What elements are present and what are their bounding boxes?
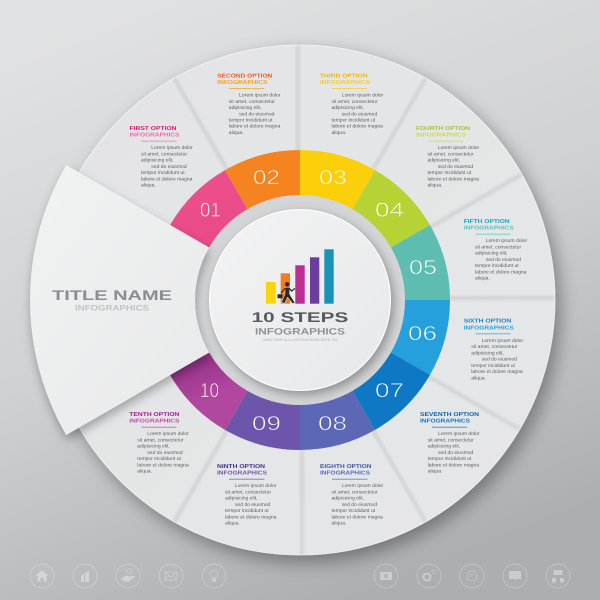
text block: seventh option: adipisicing elit, xyxy=(428,444,460,450)
text block: tenth option: sit amet, consectetur xyxy=(137,438,184,444)
text block: eighth option: sit amet, consectetur xyxy=(332,490,378,496)
text block: tenth option: TENTH OPTION xyxy=(129,412,179,418)
step numbers: 03 xyxy=(319,167,347,189)
segment 07 xyxy=(352,352,430,430)
step numbers xyxy=(200,167,437,435)
text block: fifth option: sed do eiusmod xyxy=(486,257,521,263)
step ring xyxy=(170,150,450,450)
text block: fifth option: labore et dolore magna xyxy=(475,269,527,275)
text block: sixth option: labore et dolore magna xyxy=(471,369,523,375)
text block: third option: labore et dolore magna xyxy=(332,124,383,130)
text block: sixth option: aliqua. xyxy=(471,375,486,381)
text block: tenth option: aliqua. xyxy=(137,469,152,475)
text block: fourth option: Lorem ipsum dolor xyxy=(438,145,480,151)
bar chart icon xyxy=(266,249,334,304)
title sector xyxy=(30,165,209,435)
text block: fifth option: tempor incididunt ut xyxy=(475,263,519,269)
text block: eighth option: INFOGRAPHICS xyxy=(320,471,370,477)
text block: tenth option: tempor incididunt ut xyxy=(137,456,182,462)
text block: fifth option: aliqua. xyxy=(475,276,490,282)
text block: ninth option: INFOGRAPHICS xyxy=(217,471,267,477)
text block: fifth option: Lorem ipsum dolor xyxy=(486,238,527,244)
text block: eighth option: tempor incididunt ut xyxy=(332,508,376,514)
step numbers: 04 xyxy=(375,200,404,222)
step numbers: 02 xyxy=(253,167,280,189)
text block: fifth option xyxy=(464,219,527,282)
text block: second option: Lorem ipsum dolor xyxy=(239,93,281,99)
segment 09 xyxy=(225,391,300,450)
text block: eighth option: labore et dolore magna xyxy=(332,514,383,520)
segment 05 xyxy=(391,225,450,300)
text block: eighth option: sed do eiusmod xyxy=(342,502,377,508)
text block: tenth option: Lorem ipsum dolor xyxy=(147,431,189,437)
text block: fourth option xyxy=(416,126,480,189)
icon: clock xyxy=(460,564,484,588)
text block: second option: adipisicing elit, xyxy=(229,105,261,111)
icon: running businessman xyxy=(278,282,295,304)
text block: seventh option xyxy=(420,412,480,475)
text block: ninth option: labore et dolore magna xyxy=(225,514,277,520)
text block: tenth option xyxy=(129,412,189,475)
text block: third option: THIRD OPTION xyxy=(320,73,368,79)
vector caption: VECTOR ILLUSTRATION EPS 10 xyxy=(263,338,337,342)
text block: sixth option: Lorem ipsum dolor xyxy=(482,338,523,344)
icon row xyxy=(30,564,570,588)
icon: banknote xyxy=(374,564,398,588)
step numbers: 09 xyxy=(252,413,281,435)
text block: tenth option: sed do eiusmod xyxy=(147,450,183,456)
text block: fourth option: labore et dolore magna xyxy=(428,176,479,182)
text block: third option: tempor incididunt ut xyxy=(332,118,376,124)
text block: first option: INFOGRAPHICS xyxy=(130,133,180,139)
text block: seventh option: sit amet, consectetur xyxy=(428,438,474,444)
title subtitle: INFOGRAPHICS xyxy=(75,304,150,313)
text block: first option: adipisicing elit, xyxy=(141,158,174,164)
text block: ninth option: aliqua. xyxy=(225,521,240,527)
text block: fourth option: aliqua. xyxy=(428,183,442,189)
text block: sixth option: adipisicing elit, xyxy=(471,350,504,356)
text block: third option: adipisicing elit, xyxy=(332,105,364,111)
text block: second option: labore et dolore magna xyxy=(229,124,280,130)
outer disc xyxy=(45,45,555,555)
text block: eighth option: aliqua. xyxy=(332,521,346,527)
text block: first option: FIRST OPTION xyxy=(130,126,177,132)
centre subheading: INFOGRAPHICS xyxy=(255,326,345,336)
text block: first option: sit amet, consectetur xyxy=(141,152,187,158)
text block: third option: INFOGRAPHICS xyxy=(320,80,370,86)
icon: light bulb xyxy=(202,564,226,588)
centre heading: 10 STEPS xyxy=(252,309,348,325)
icon: envelope xyxy=(159,564,183,588)
text block: eighth option: adipisicing elit, xyxy=(332,496,364,502)
segment 10 xyxy=(170,352,248,430)
text block: first option: tempor incididunt ut xyxy=(141,170,185,176)
text block: third option xyxy=(320,73,384,136)
text block: second option xyxy=(217,73,281,136)
icon: hierarchy xyxy=(546,564,570,588)
text block: seventh option: aliqua. xyxy=(428,469,442,475)
text block: first option: aliqua. xyxy=(141,183,156,189)
text block: first option: labore et dolore magna xyxy=(141,176,193,182)
text block: tenth option: labore et dolore magna xyxy=(137,462,189,468)
text block: ninth option: sed do eiusmod xyxy=(235,502,271,508)
centre circle xyxy=(210,210,390,390)
icon: gears xyxy=(417,564,441,588)
text block: seventh option: SEVENTH OPTION xyxy=(420,412,479,418)
text block: sixth option: INFOGRAPHICS xyxy=(464,325,514,331)
text block: third option: sed do eiusmod xyxy=(342,111,377,117)
text block: first option: Lorem ipsum dolor xyxy=(151,145,193,151)
inner grey ring xyxy=(194,194,406,406)
segment 01 xyxy=(170,170,248,248)
text block: fifth option: FIFTH OPTION xyxy=(464,219,510,225)
text block: fourth option: sed do eiusmod xyxy=(438,164,473,170)
text block: second option: aliqua. xyxy=(229,130,244,136)
text block: tenth option: INFOGRAPHICS xyxy=(129,419,180,425)
text block: third option: aliqua. xyxy=(332,130,346,136)
text block: second option: INFOGRAPHICS xyxy=(217,80,268,86)
text block: sixth option: sed do eiusmod xyxy=(482,357,517,363)
icon: speech bubble xyxy=(503,564,527,588)
segment 06 xyxy=(391,300,450,375)
text block: ninth option xyxy=(217,464,277,527)
icon: hand with coin xyxy=(116,564,140,588)
icon: growth chart xyxy=(73,564,97,588)
text block: second option: tempor incididunt ut xyxy=(229,118,273,124)
text block: seventh option: sed do eiusmod xyxy=(438,450,474,456)
text block: fifth option: INFOGRAPHICS xyxy=(464,226,514,232)
text block: sixth option: tempor incididunt ut xyxy=(471,363,516,369)
text block: first option: sed do eiusmod xyxy=(151,164,187,170)
text block: second option: sed do eiusmod xyxy=(239,111,275,117)
text block: seventh option: INFOGRAPHICS xyxy=(420,419,470,425)
text block: seventh option: tempor incididunt ut xyxy=(428,456,472,462)
step numbers: 10 xyxy=(200,380,219,402)
text block: seventh option: labore et dolore magna xyxy=(428,462,479,468)
text block: ninth option: NINTH OPTION xyxy=(217,464,265,470)
title name: TITLE NAME xyxy=(52,287,172,303)
step numbers: 05 xyxy=(409,257,437,279)
segment 08 xyxy=(300,391,375,450)
text block: second option: SECOND OPTION xyxy=(217,73,272,79)
text block: fourth option: INFOGRAPHICS xyxy=(416,133,466,139)
text block: sixth option: sit amet, consectetur xyxy=(471,344,518,350)
text block: third option: Lorem ipsum dolor xyxy=(342,93,384,99)
text block: sixth option xyxy=(464,319,523,381)
step numbers: 01 xyxy=(200,200,221,222)
text block: ninth option: adipisicing elit, xyxy=(225,496,258,502)
text block: ninth option: sit amet, consectetur xyxy=(225,490,271,496)
icon: home xyxy=(30,564,54,588)
text block: fourth option: tempor incididunt ut xyxy=(428,170,472,176)
text block: fourth option: adipisicing elit, xyxy=(428,158,460,164)
text block: fifth option: sit amet, consectetur xyxy=(475,244,521,250)
text block: tenth option: adipisicing elit, xyxy=(137,444,170,450)
text block: eighth option: EIGHTH OPTION xyxy=(320,464,372,470)
text block: ninth option: Lorem ipsum dolor xyxy=(235,483,277,489)
text block: eighth option: Lorem ipsum dolor xyxy=(342,483,384,489)
step numbers: 07 xyxy=(375,380,404,402)
text block: third option: sit amet, consectetur xyxy=(332,99,378,105)
segment 03 xyxy=(300,150,375,209)
step numbers: 06 xyxy=(408,323,437,345)
step numbers: 08 xyxy=(318,413,347,435)
text block: fifth option: adipisicing elit, xyxy=(475,251,508,257)
text block: eighth option xyxy=(320,464,384,527)
segment 02 xyxy=(225,150,300,209)
text block: seventh option: Lorem ipsum dolor xyxy=(438,431,480,437)
text block: fourth option: FOURTH OPTION xyxy=(416,126,470,132)
text block: fourth option: sit amet, consectetur xyxy=(428,152,474,158)
text block: ninth option: tempor incididunt ut xyxy=(225,508,269,514)
text block: sixth option: SIXTH OPTION xyxy=(464,319,511,325)
segment 04 xyxy=(352,170,430,248)
text block: second option: sit amet, consectetur xyxy=(229,99,275,105)
text block: first option xyxy=(130,126,193,189)
